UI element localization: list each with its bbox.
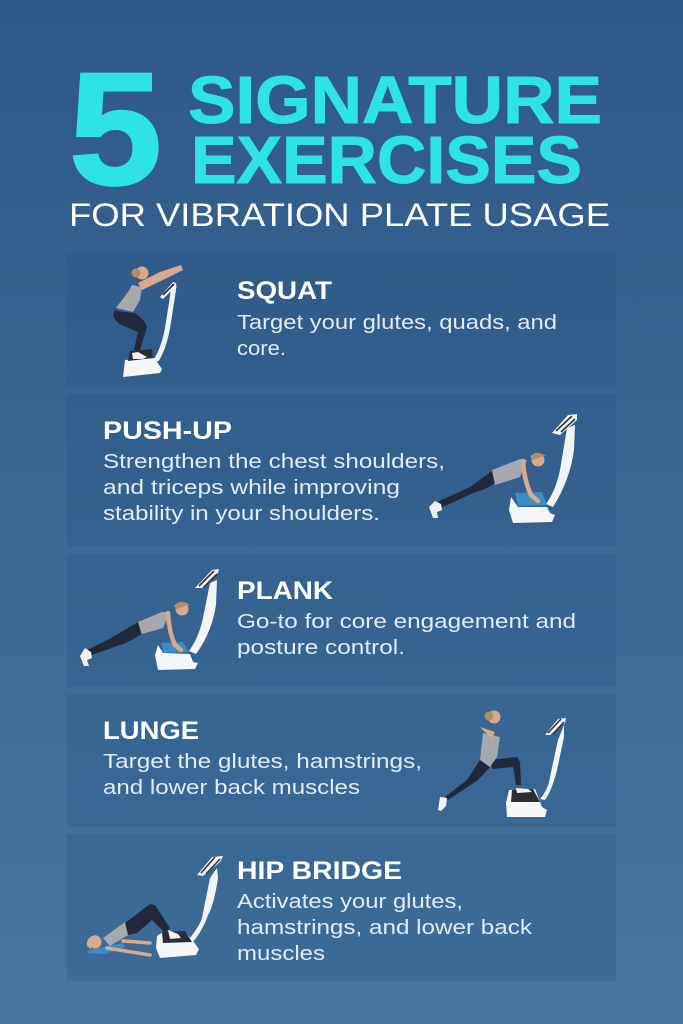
heading: plank: PLANK <box>237 577 333 605</box>
description: lunge: and lower back muscles <box>103 776 360 799</box>
title <box>69 39 610 233</box>
heading: lunge: LUNGE <box>103 717 199 745</box>
panel: hip bridge <box>67 834 616 981</box>
heading: squat: SQUAT <box>237 277 332 305</box>
panel: plank <box>67 554 616 687</box>
description: push-up: stability in your shoulders. <box>103 502 380 525</box>
panel: push-up <box>67 394 616 547</box>
description: squat: Target your glutes, quads, and <box>237 311 557 334</box>
description: hip bridge: hamstrings, and lower back <box>237 916 533 939</box>
panel: lunge <box>67 694 616 827</box>
description: plank: Go-to for core engagement and <box>237 610 576 633</box>
subtitle: FOR VIBRATION PLATE USAGE <box>69 197 610 233</box>
icon: woman doing hip bridge with feet on vibration plate <box>87 856 223 958</box>
icon: woman squatting on vibration plate <box>113 265 183 377</box>
icon: woman in plank on vibration plate <box>80 569 219 670</box>
description: hip bridge: Activates your glutes, <box>237 890 463 913</box>
description: push-up: and triceps while improving <box>103 476 400 499</box>
icon: woman doing push-up on vibration plate <box>429 414 577 523</box>
heading: push-up: PUSH-UP <box>103 417 232 445</box>
description: push-up: Strengthen the chest shoulders, <box>103 450 445 473</box>
description: squat: core. <box>237 337 286 360</box>
big number 5: 5 <box>69 39 162 218</box>
heading line: signature: SIGNATURE <box>188 63 602 138</box>
description: hip bridge: muscles <box>237 942 325 965</box>
icon: woman lunging on vibration plate <box>438 710 566 817</box>
heading line: exercises: EXERCISES <box>191 123 582 198</box>
description: lunge: Target the glutes, hamstrings, <box>103 750 422 773</box>
heading: hip bridge: HIP BRIDGE <box>237 857 402 885</box>
description: plank: posture control. <box>237 636 405 659</box>
panel: squat <box>67 253 616 387</box>
